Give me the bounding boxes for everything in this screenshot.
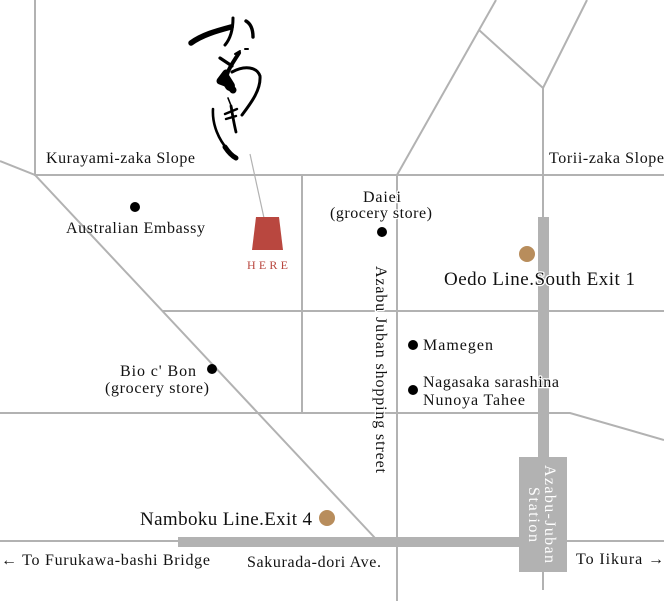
landmark: Nagasaka sarashina Nunoya Tahee: Nunoya Tahee bbox=[423, 392, 525, 409]
Azabu-Juban Station bbox=[519, 457, 567, 572]
logo: brush calligraphy bbox=[191, 18, 260, 158]
Azabu-Juban Station: Azabu-Juban bbox=[541, 465, 558, 563]
landmark: Daiei: (grocery store) bbox=[330, 205, 432, 222]
here marker bbox=[247, 154, 288, 272]
direction labels bbox=[1, 551, 664, 569]
exit: Oedo Line South Exit 1: Oedo Line.South Exit 1 bbox=[444, 269, 635, 290]
landmark: Mamegen: Mamegen bbox=[423, 337, 493, 354]
slope and street labels: Torii-zaka Slope bbox=[549, 150, 664, 167]
landmark: Daiei: Daiei bbox=[363, 189, 402, 206]
slope and street labels: Sakurada-dori Ave. bbox=[247, 554, 381, 571]
landmark: Daiei bbox=[330, 189, 432, 237]
slope and street labels bbox=[46, 150, 664, 571]
direction labels: ← To Furukawa-bashi Bridge bbox=[1, 552, 210, 569]
landmark: Australian Embassy: Australian Embassy bbox=[66, 220, 205, 237]
exit: Namboku Line Exit 4: Namboku Line.Exit 4 bbox=[140, 509, 312, 530]
Azabu-Juban Station: Station bbox=[525, 487, 542, 542]
landmark: Nagasaka sarashina Nunoya Tahee bbox=[408, 374, 559, 409]
subway line: Oedo bbox=[538, 217, 549, 459]
subway line: Namboku bbox=[178, 537, 521, 547]
landmark: Bio c' Bon: (grocery store) bbox=[105, 380, 209, 397]
landmark: Australian Embassy bbox=[66, 202, 205, 237]
exit: Oedo Line South Exit 1 bbox=[444, 246, 635, 290]
here marker: HERE bbox=[247, 258, 288, 272]
direction labels: To Iikura → bbox=[576, 551, 664, 568]
landmark: Nagasaka sarashina Nunoya Tahee: Nagasaka sarashina bbox=[423, 374, 559, 391]
landmark: Bio c' Bon bbox=[105, 363, 217, 397]
landmark: Bio c' Bon: Bio c' Bon bbox=[120, 363, 196, 380]
slope and street labels: Kurayami-zaka Slope bbox=[46, 150, 195, 167]
slope and street labels: Azabu Juban shopping street bbox=[372, 266, 389, 474]
